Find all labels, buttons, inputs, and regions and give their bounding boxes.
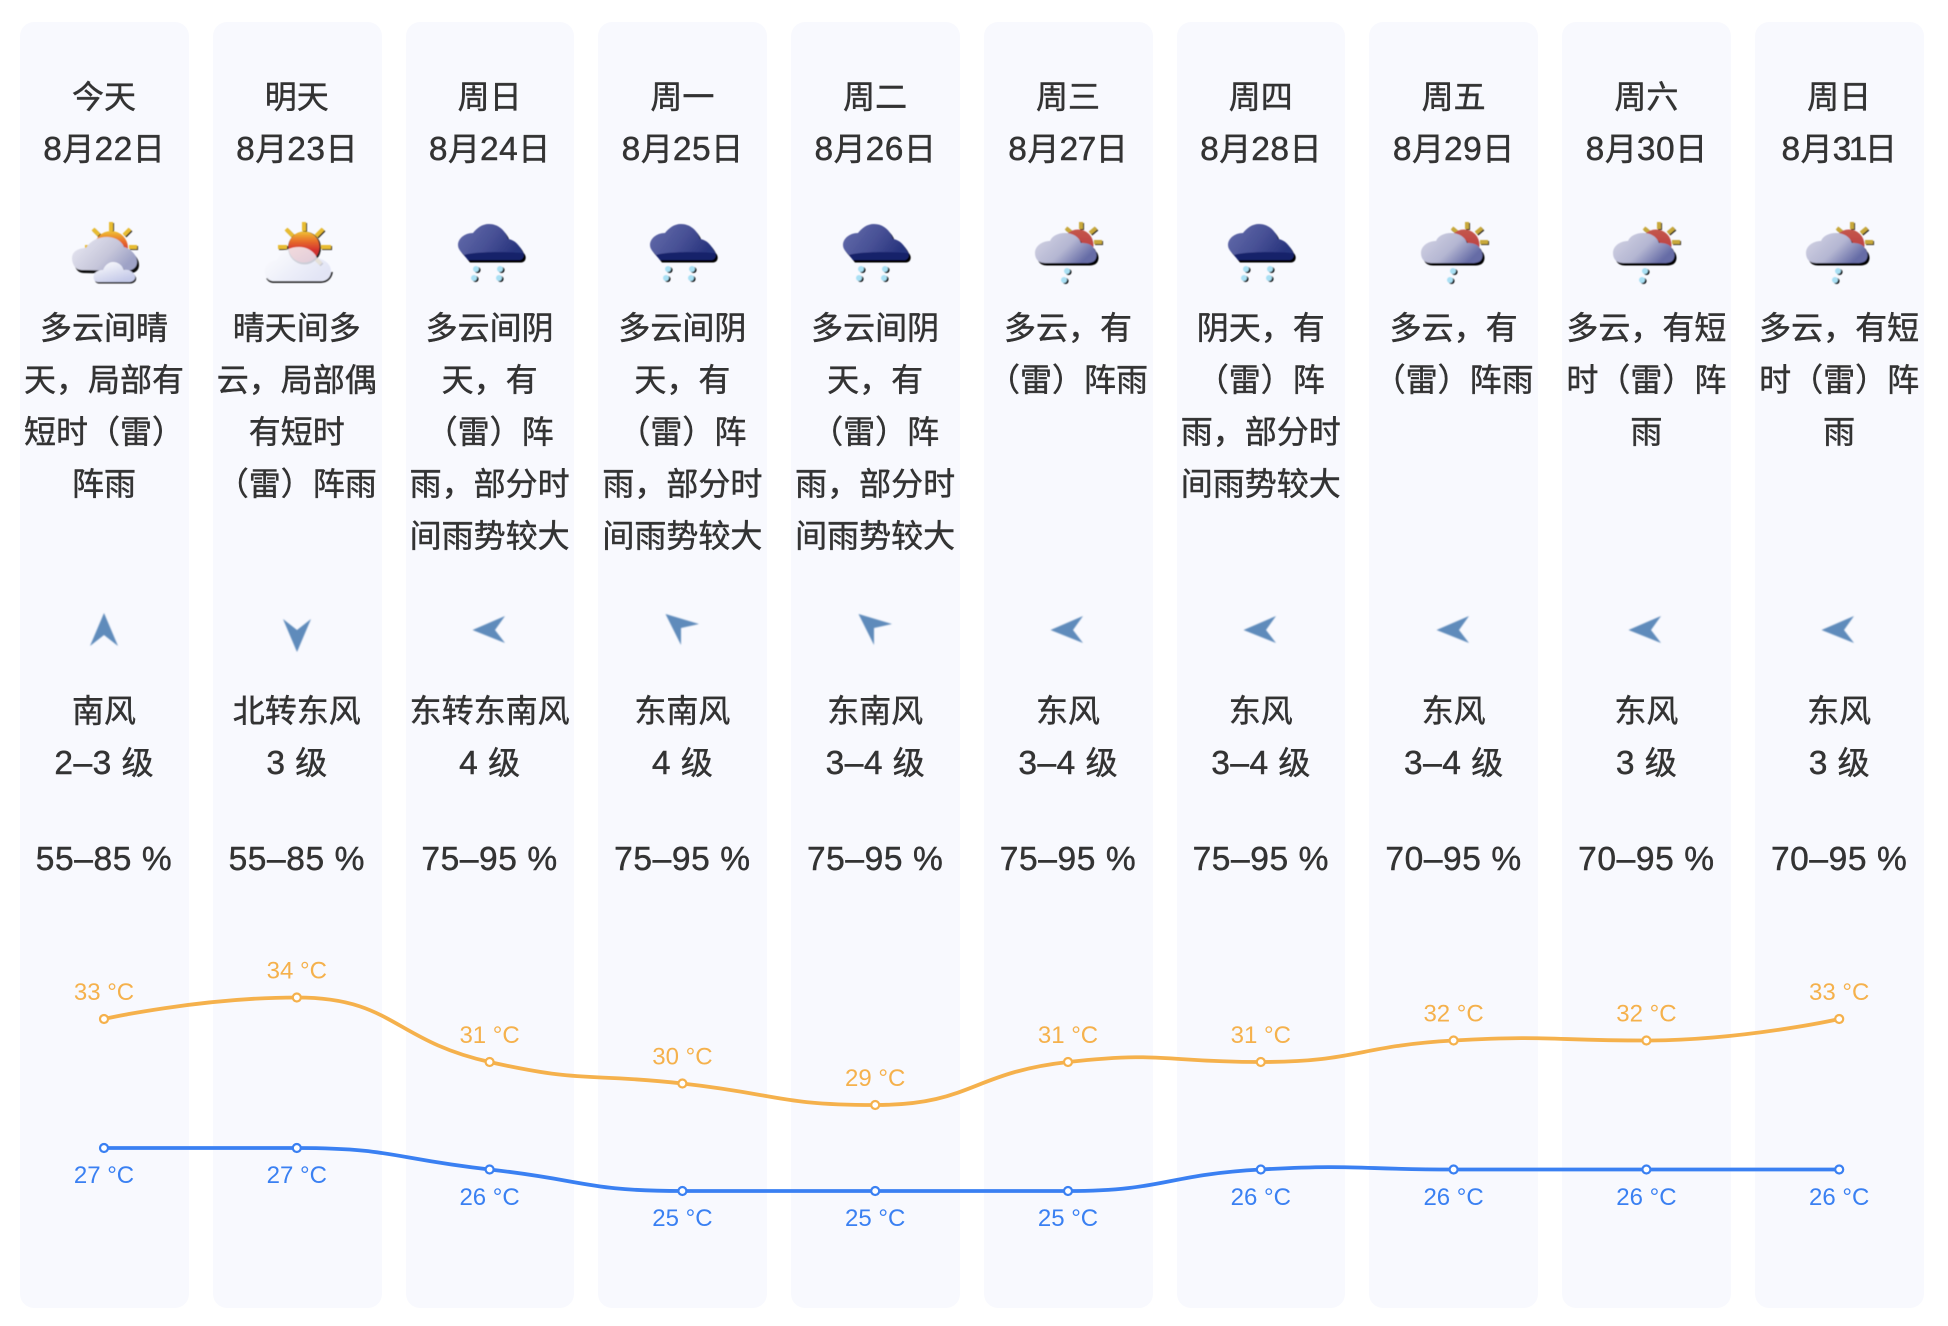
wind text: 4 级: [459, 745, 520, 782]
low temperature series: [74, 1144, 1869, 1232]
weather description: 间雨势较大: [410, 518, 570, 554]
high temperature series: [74, 958, 1869, 1109]
wind text: 东南风: [827, 693, 923, 729]
high temperature series: 31 °C: [1038, 1022, 1098, 1049]
wind text: [1018, 693, 1118, 782]
date heading: 8月23日: [236, 131, 358, 168]
icon: sunny with cloud: [266, 221, 334, 284]
humidity: 70–95 %: [1578, 840, 1715, 878]
icon: wind arrow: [472, 616, 506, 644]
wind text: 东风: [1422, 693, 1486, 729]
high temperature series: 32 °C: [1423, 1000, 1484, 1028]
weather description: 雨: [1823, 414, 1855, 450]
humidity: 75–95 %: [1193, 840, 1329, 878]
weather description: 多云间阴: [618, 310, 746, 346]
weather description: （雷）阵: [426, 414, 554, 450]
icon: wind arrow: [1050, 616, 1084, 644]
icon: wind arrow: [1243, 616, 1276, 644]
weather description: 时（雷）阵: [1566, 362, 1726, 398]
weather description: [1743, 302, 1936, 458]
weather description: 间雨势较大: [795, 518, 955, 554]
weather description: [410, 310, 570, 554]
weather description: 雨，部分时: [795, 466, 955, 502]
weather description: 阵雨: [72, 466, 136, 502]
high temperature series: 33 °C: [1809, 979, 1869, 1006]
icon: wind arrow: [90, 612, 118, 646]
wind text: 东风: [1229, 693, 1293, 729]
date heading: 周四: [1229, 79, 1293, 115]
wind text: 东风: [1807, 693, 1871, 729]
panel: 明天 8月23日: [213, 22, 382, 1308]
low temperature series: 26 °C: [1616, 1184, 1677, 1211]
wind text: 3–4 级: [826, 745, 925, 782]
wind text: 东转东南风: [410, 693, 570, 729]
weather description: 间雨势较大: [602, 518, 762, 554]
wind text: 东风: [1614, 693, 1678, 729]
wind text: [233, 693, 361, 782]
wind text: 3 级: [1809, 745, 1870, 782]
panel: 周日 8月31日: [1755, 22, 1924, 1308]
low temperature series: 25 °C: [652, 1205, 713, 1232]
wind text: 2–3 级: [54, 745, 154, 782]
date heading: [1550, 71, 1743, 176]
low temperature series: 26 °C: [1423, 1184, 1484, 1211]
weather description: 短时（雷）: [24, 414, 184, 450]
weather description: （雷）阵: [1197, 362, 1325, 398]
weather description: 雨，部分时: [1181, 414, 1341, 450]
icon: wind arrow: [858, 613, 892, 645]
wind text: 东南风: [634, 693, 730, 729]
high temperature series: 33 °C: [74, 979, 134, 1006]
date heading: 8月30日: [1586, 131, 1707, 168]
weather description: （雷）阵雨: [1374, 362, 1534, 398]
date heading: 周一: [650, 79, 714, 115]
date heading: 8月31日: [1781, 131, 1897, 168]
date heading: [1008, 79, 1128, 168]
weather description: 多云间阴: [426, 310, 554, 346]
date heading: 8月27日: [1008, 131, 1128, 168]
date heading: 周六: [1614, 79, 1678, 115]
weather description: （雷）阵: [811, 414, 939, 450]
icon: wind arrow: [1809, 606, 1869, 656]
date heading: 8月25日: [622, 131, 743, 168]
weather description: （雷）阵: [618, 414, 746, 450]
low temperature series: 25 °C: [1038, 1205, 1098, 1232]
date heading: [622, 79, 743, 168]
high temperature series: 34 °C: [267, 958, 327, 984]
icon: wind arrow: [282, 618, 312, 652]
wind text: [634, 693, 730, 782]
panel: 周六 8月30日: [1562, 22, 1731, 1308]
humidity: 55–85 %: [36, 840, 172, 878]
humidity: 75–95 %: [1000, 840, 1136, 878]
wind text: [1550, 685, 1743, 790]
icon: rain cloud: [457, 223, 526, 283]
panel: 周一 8月25日: [598, 22, 767, 1308]
weather description: [988, 310, 1148, 398]
wind text: 东风: [1036, 693, 1100, 729]
low temperature series: 26 °C: [1231, 1184, 1291, 1211]
weather description: 雨: [1630, 414, 1662, 450]
date heading: 今天: [72, 79, 136, 115]
wind text: 南风: [72, 693, 136, 729]
date heading: 8月26日: [814, 131, 936, 168]
weather description: 时（雷）阵: [1759, 362, 1919, 398]
date heading: 明天: [265, 79, 329, 115]
weather description: [602, 310, 762, 554]
icon: shower with sun: [1420, 221, 1490, 285]
high temperature series: 29 °C: [845, 1065, 905, 1092]
wind text: [54, 693, 154, 782]
date heading: 8月22日: [43, 131, 165, 168]
wind text: [826, 693, 925, 782]
weather description: [1181, 310, 1341, 502]
wind text: 4 级: [652, 745, 713, 782]
weather description: 多云，有: [1004, 310, 1132, 346]
date heading: [43, 79, 165, 168]
date heading: 8月28日: [1200, 131, 1322, 168]
weather description: 多云，有短: [1759, 310, 1919, 346]
date heading: [236, 79, 358, 168]
wind text: [1743, 685, 1936, 790]
weather description: 多云，有: [1390, 310, 1518, 346]
wind text: 3–4 级: [1018, 745, 1118, 782]
wind text: 3–4 级: [1404, 745, 1503, 782]
weather description: 晴天间多: [233, 310, 361, 346]
weather description: 多云间晴: [40, 310, 168, 346]
weather description: [1550, 302, 1743, 458]
weather description: 云，局部偶: [217, 362, 377, 398]
panel: 今天 8月22日: [20, 22, 188, 1308]
weather description: 有短时: [249, 414, 345, 450]
icon: wind arrow: [1436, 616, 1470, 644]
weather description: 多云间阴: [811, 310, 939, 346]
icon: rain cloud: [649, 223, 718, 283]
weather description: [217, 310, 377, 502]
icon: shower with sun: [1034, 221, 1104, 285]
high temperature series: 31 °C: [1231, 1022, 1291, 1049]
date heading: 8月24日: [429, 131, 550, 168]
wind text: 3–4 级: [1211, 745, 1310, 782]
icon: shower with sun: [1779, 210, 1899, 300]
panel: 周三 8月27日: [984, 22, 1152, 1308]
humidity: 75–95 %: [807, 840, 943, 878]
wind text: [1211, 693, 1310, 782]
weather description: 多云，有短: [1566, 310, 1726, 346]
low temperature series: 25 °C: [845, 1205, 905, 1232]
wind text: 3 级: [1616, 745, 1677, 782]
humidity: 75–95 %: [421, 840, 558, 878]
date heading: [429, 79, 550, 168]
icon: wind arrow: [665, 613, 699, 645]
high temperature series: 32 °C: [1616, 1000, 1677, 1028]
date heading: 8月29日: [1393, 131, 1514, 168]
low temperature series: 27 °C: [74, 1162, 134, 1189]
panel: 周四 8月28日: [1177, 22, 1345, 1308]
weather description: 天，有: [442, 362, 538, 398]
date heading: 周二: [843, 79, 907, 115]
wind text: 北转东风: [233, 693, 361, 729]
panel: 周日 8月24日: [406, 22, 574, 1308]
date heading: [1743, 71, 1936, 176]
wind text: 3 级: [266, 745, 327, 782]
weather description: [1374, 310, 1534, 398]
weather description: 天，局部有: [24, 362, 184, 398]
icon: partly cloudy with sun: [72, 221, 140, 284]
date heading: [1393, 79, 1514, 168]
weather description: 雨，部分时: [602, 466, 762, 502]
low temperature series: 26 °C: [1809, 1184, 1869, 1211]
weather description: 间雨势较大: [1181, 466, 1341, 502]
low temperature series: 27 °C: [267, 1162, 327, 1189]
low temperature series: 26 °C: [459, 1184, 520, 1211]
date heading: 周日: [458, 79, 522, 115]
weather description: 天，有: [827, 362, 923, 398]
weather description: [24, 310, 184, 502]
weather description: 天，有: [634, 362, 730, 398]
icon: shower with sun: [1586, 210, 1706, 300]
weather description: 雨，部分时: [410, 466, 570, 502]
humidity: 70–95 %: [1771, 840, 1907, 878]
wind text: [410, 693, 570, 782]
icon: wind arrow: [1616, 606, 1676, 656]
wind text: [1404, 693, 1503, 782]
weather description: 阴天，有: [1197, 310, 1325, 346]
weather description: （雷）阵雨: [988, 362, 1148, 398]
date heading: [814, 79, 936, 168]
date heading: 周三: [1036, 79, 1100, 115]
high temperature series: 30 °C: [652, 1044, 713, 1070]
high temperature series: 31 °C: [459, 1022, 520, 1049]
humidity: 75–95 %: [614, 840, 751, 878]
humidity: 70–95 %: [1385, 840, 1522, 878]
weather description: [795, 310, 955, 554]
humidity: 55–85 %: [229, 840, 365, 878]
panel: 周五 8月29日: [1369, 22, 1538, 1308]
panel: 周二 8月26日: [791, 22, 960, 1308]
weather description: （雷）阵雨: [217, 466, 377, 502]
date heading: 周五: [1422, 79, 1486, 115]
date heading: [1200, 79, 1322, 168]
icon: rain cloud: [842, 223, 912, 283]
icon: rain cloud: [1227, 223, 1296, 283]
date heading: 周日: [1807, 79, 1871, 115]
